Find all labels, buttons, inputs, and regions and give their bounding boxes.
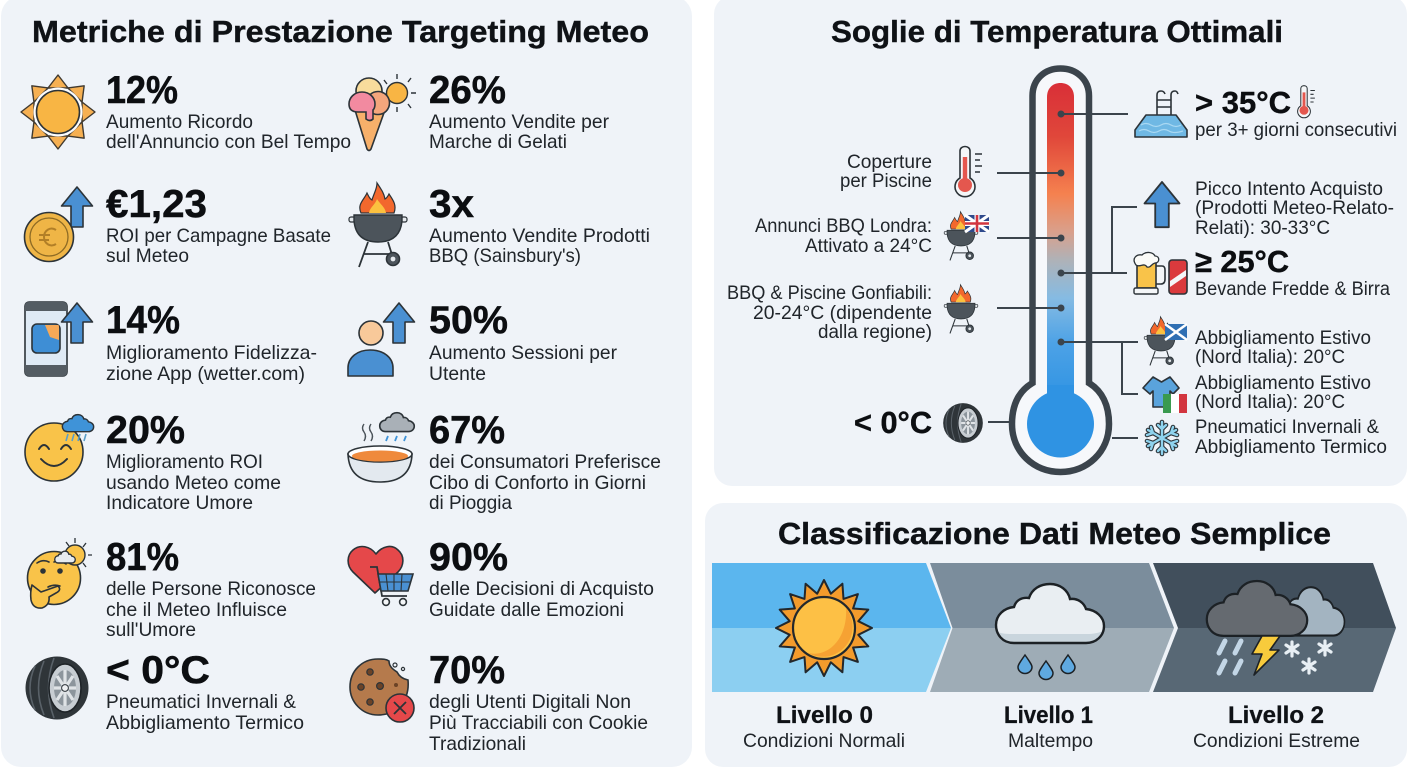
chart: thermometer: [1012, 68, 1109, 472]
description: Pneumatici Invernali &: [106, 691, 296, 713]
description: Aumento Sessioni per: [429, 342, 617, 364]
description: Tradizionali: [429, 733, 526, 755]
icon: up arrow: [1144, 182, 1180, 227]
icon: grill: [944, 285, 978, 333]
label: London BBQ ads: Annunci BBQ Londra:: [755, 216, 932, 237]
label: cold drinks and beer: ≥ 25°C: [1195, 244, 1289, 279]
icon: barbecue grill: [349, 183, 407, 267]
description: sull'Umore: [106, 619, 196, 641]
description: Aumento Vendite Prodotti: [429, 225, 650, 247]
chevron: level 1: [930, 563, 1174, 692]
description: delle Decisioni di Acquisto: [429, 578, 654, 600]
icon: shirt with Italian flag: [1143, 377, 1187, 413]
label: cold drinks and beer: Bevande Fredde & Birra: [1195, 279, 1390, 300]
metric: 70%: [350, 649, 648, 755]
icon: sun: [776, 580, 872, 676]
panel: weather data classification: [705, 503, 1407, 767]
metric: 20%: [25, 409, 281, 514]
description: [429, 225, 650, 267]
description: che il Meteo Influisce: [106, 599, 287, 621]
description: [106, 111, 351, 153]
value: 12%: [106, 69, 178, 112]
description: [429, 691, 648, 755]
icon: grill with Scottish flag: [1144, 317, 1187, 365]
label: above 35 degrees: [1135, 85, 1397, 141]
value: 26%: [429, 69, 506, 112]
label: winter tires and thermal clothing: Abbigliamento Termico: [1195, 437, 1387, 458]
description: dell'Annuncio con Bel Tempo: [106, 131, 351, 153]
icon: beer and can: [1134, 252, 1187, 294]
icon: tire: [26, 656, 88, 720]
icon: soup bowl with rain cloud: [348, 413, 414, 482]
description: [429, 111, 609, 153]
panel: temperature thresholds: [714, 0, 1407, 486]
chevron: level 0: [712, 563, 951, 692]
description: degli Utenti Digitali Non: [429, 691, 631, 713]
label: winter tires and thermal clothing: Pneumatici Invernali &: [1195, 417, 1379, 438]
title: classification: Classificazione Dati Meteo Semplice: [778, 516, 1331, 551]
label: summer clothing, shirt icon: Abbigliamento Estivo: [1195, 373, 1371, 394]
icon: tire: [943, 403, 983, 443]
value: < 0°C: [106, 649, 210, 692]
description: Abbigliamento Termico: [106, 712, 304, 734]
icon: coin with arrow: [24, 187, 92, 262]
description: Indicatore Umore: [106, 492, 253, 514]
icon: sun: [21, 75, 95, 149]
label: pool covers: [840, 146, 982, 197]
label: Condizioni Normali: [743, 731, 905, 752]
description: [429, 578, 654, 621]
description: dei Consumatori Preferisce: [429, 451, 661, 473]
label: BBQ and inflatable pools: [727, 283, 978, 343]
metric: 67%: [348, 409, 661, 514]
icon: thermometer: [1298, 86, 1315, 118]
label: below zero: < 0°C: [854, 405, 932, 440]
description: [106, 578, 316, 641]
icon: user with arrow: [348, 303, 414, 376]
icon: snowflake: [1147, 422, 1177, 454]
description: [106, 225, 331, 267]
metric: 90%: [348, 536, 654, 621]
label: summer clothing, grill icon: (Nord Italia): 20°C: [1195, 347, 1345, 368]
label: [1004, 702, 1093, 752]
label: BBQ and inflatable pools: dalla regione): [818, 322, 932, 343]
value: 3x: [429, 183, 474, 226]
icon: ice cream and sun: [349, 74, 416, 150]
icon: rain cloud: [996, 584, 1104, 680]
icon: thermometer: [955, 146, 982, 197]
label: above 35 degrees: > 35°C: [1195, 85, 1291, 120]
level 2: [1153, 563, 1396, 752]
metric: 81%: [28, 536, 316, 641]
value: 90%: [429, 536, 508, 579]
description: Miglioramento ROI: [106, 451, 263, 473]
label: summer clothing, shirt icon: (Nord Italia): 20°C: [1195, 392, 1345, 413]
label: [743, 702, 905, 752]
description: Aumento Ricordo: [106, 111, 253, 133]
label: London BBQ ads: [755, 212, 989, 260]
description: Guidate dalle Emozioni: [429, 599, 624, 621]
description: [429, 451, 661, 514]
label: above 35 degrees: per 3+ giorni consecutivi: [1195, 120, 1397, 141]
label: winter tires and thermal clothing: [1147, 417, 1387, 458]
description: zione App (wetter.com): [106, 363, 305, 385]
description: delle Persone Riconosce: [106, 578, 316, 600]
label: Livello 2: [1228, 702, 1324, 729]
description: ROI per Campagne Basate: [106, 225, 331, 247]
icon: storm with lightning, rain and snow: [1207, 581, 1344, 675]
description: sul Meteo: [106, 245, 189, 267]
value: 50%: [429, 299, 508, 342]
value: €1,23: [106, 183, 207, 226]
label: Maltempo: [1008, 731, 1093, 752]
metric: 12%: [21, 69, 351, 153]
panel: performance metrics: [1, 0, 692, 767]
label: below zero: [854, 403, 983, 443]
label: purchase intent peak: Picco Intento Acquisto: [1195, 179, 1383, 200]
value: 70%: [429, 649, 505, 692]
description: Più Tracciabili con Cookie: [429, 712, 648, 734]
metric: 3x: [349, 183, 650, 267]
level 0: [712, 563, 951, 752]
label: BBQ and inflatable pools: BBQ & Piscine Gonfiabili:: [727, 283, 932, 304]
label: Livello 1: [1004, 702, 1093, 729]
title: temperature thresholds: Soglie di Temperatura Ottimali: [831, 14, 1283, 49]
description: usando Meteo come: [106, 472, 281, 494]
description: Cibo di Conforto in Giorni: [429, 472, 646, 494]
label: BBQ and inflatable pools: 20-24°C (dipendente: [753, 303, 932, 324]
description: [429, 342, 617, 385]
metric: €1,23: [24, 183, 331, 267]
metric: 50%: [348, 299, 617, 385]
value: 20%: [106, 409, 185, 452]
label: summer clothing, grill icon: Abbigliamento Estivo: [1195, 328, 1371, 349]
icon: grill with UK flag: [944, 212, 989, 260]
description: [106, 342, 317, 385]
description: di Pioggia: [429, 492, 512, 514]
label: Livello 0: [776, 702, 873, 729]
label: purchase intent peak: [1144, 179, 1394, 239]
metric: < 0°C: [26, 649, 304, 734]
label: cold drinks and beer: [1134, 244, 1390, 300]
description: Miglioramento Fidelizza-: [106, 342, 317, 364]
label: summer clothing, shirt icon: [1143, 373, 1371, 413]
label: [1193, 702, 1360, 752]
label: purchase intent peak: Relati): 30-33°C: [1195, 218, 1330, 239]
description: Aumento Vendite per: [429, 111, 609, 133]
label: purchase intent peak: (Prodotti Meteo-Relato-: [1195, 198, 1394, 219]
label: London BBQ ads: Attivato a 24°C: [805, 236, 932, 257]
connector lines: [988, 110, 1138, 438]
metric: 26%: [349, 69, 609, 153]
icon: swimming pool: [1135, 91, 1187, 137]
title: metrics: Metriche di Prestazione Targeting Meteo: [32, 14, 649, 49]
level 1: [930, 563, 1174, 752]
label: pool covers: per Piscine: [840, 171, 932, 192]
icon: heart with shopping cart: [348, 547, 413, 605]
description: Utente: [429, 363, 486, 385]
icon: thinking face with sun and cloud: [28, 538, 92, 608]
label: pool covers: Coperture: [847, 152, 932, 173]
icon: phone with arrow: [25, 302, 92, 376]
description: BBQ (Sainsbury's): [429, 245, 581, 267]
icon: smiling face with rain cloud: [25, 415, 94, 481]
value: 67%: [429, 409, 505, 452]
chevron: level 2: [1153, 563, 1396, 692]
description: Marche di Gelati: [429, 131, 567, 153]
metric: 14%: [25, 299, 317, 385]
value: 14%: [106, 299, 180, 342]
description: [106, 451, 281, 514]
label: Condizioni Estreme: [1193, 731, 1360, 752]
label: summer clothing, grill icon: [1144, 317, 1371, 368]
description: [106, 691, 304, 734]
icon: cookie with cross: [350, 659, 414, 722]
value: 81%: [106, 536, 179, 579]
